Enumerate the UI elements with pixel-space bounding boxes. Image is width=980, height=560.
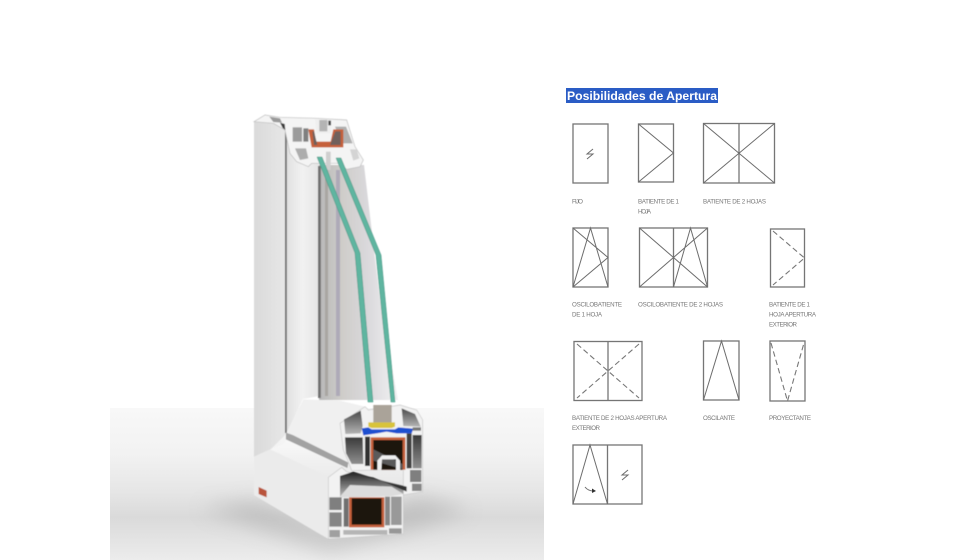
- OSCILANTE: OSCILANTE: [703, 415, 735, 422]
- FIJO: FIJO: [572, 198, 583, 206]
- PROYECTANTE: [769, 341, 811, 422]
- BATIENTE DE 1 HOJA APERTURA EXTERIOR: BATIENTE DE 1: [769, 302, 811, 308]
- BATIENTE DE 1 HOJA APERTURA EXTERIOR: HOJA APERTURA: [769, 312, 817, 318]
- OSCILOBATIENTE DE 2 HOJAS: OSCILOBATIENTE DE 2 HOJAS: [638, 302, 723, 308]
- sash steel reinforcement: [371, 437, 405, 470]
- BATIENTE DE 2 HOJAS: BATIENTE DE 2 HOJAS: [703, 198, 766, 206]
- combined oscillating and fixed: [573, 445, 642, 504]
- outer frame left face: [254, 115, 328, 539]
- OSCILANTE: [703, 341, 739, 422]
- frame steel reinforcement: [349, 497, 384, 527]
- glazing reveal: [319, 165, 398, 400]
- yellow seal: [368, 422, 395, 428]
- sash top surface: [287, 399, 365, 462]
- FIJO: [572, 124, 608, 206]
- gasket strip: [286, 433, 348, 468]
- OSCILOBATIENTE DE 1 HOJA: [572, 228, 622, 318]
- BATIENTE DE 1 HOJA APERTURA EXTERIOR: [769, 229, 817, 328]
- BATIENTE DE 1 HOJA: BATIENTE DE 1: [638, 198, 680, 206]
- heading highlight and title: Posibilidades de Apertura: [567, 89, 717, 103]
- BATIENTE DE 2 HOJAS APERTURA EXTERIOR: [572, 342, 668, 432]
- spacer and desiccant: [373, 405, 392, 423]
- reveal stripes: [285, 125, 340, 433]
- frame front: [254, 449, 328, 539]
- inner glass pane: [317, 157, 373, 402]
- window profile cutaway: [254, 115, 423, 539]
- BATIENTE DE 1 HOJA: HOJA: [638, 208, 652, 216]
- BATIENTE DE 2 HOJAS APERTURA EXTERIOR: EXTERIOR: [572, 425, 601, 432]
- PROYECTANTE: PROYECTANTE: [769, 415, 811, 422]
- sash section: [340, 405, 423, 495]
- top cross-section: [254, 115, 363, 170]
- opening-type diagrams: [572, 124, 817, 504]
- floor shadow: [200, 495, 470, 552]
- sash front face: [286, 140, 319, 432]
- frame section: [328, 467, 403, 539]
- BATIENTE DE 2 HOJAS APERTURA EXTERIOR: BATIENTE DE 2 HOJAS APERTURA: [572, 415, 668, 422]
- blue gasket: [362, 427, 413, 435]
- floor backdrop: [110, 408, 544, 560]
- OSCILOBATIENTE DE 1 HOJA: OSCILOBATIENTE: [572, 302, 622, 308]
- OSCILOBATIENTE DE 2 HOJAS: [638, 228, 723, 308]
- frame top sill: [270, 440, 347, 477]
- BATIENTE DE 1 HOJA: [638, 124, 680, 216]
- badge: [259, 487, 267, 497]
- frame chambers: [329, 497, 342, 510]
- gap wedge: [340, 472, 403, 497]
- OSCILOBATIENTE DE 1 HOJA: DE 1 HOJA: [572, 312, 603, 318]
- lower cross-section: [254, 399, 423, 539]
- outer glass pane: [336, 158, 395, 402]
- sash chambers: [344, 411, 363, 434]
- BATIENTE DE 1 HOJA APERTURA EXTERIOR: EXTERIOR: [769, 322, 798, 328]
- BATIENTE DE 2 HOJAS: [703, 124, 774, 206]
